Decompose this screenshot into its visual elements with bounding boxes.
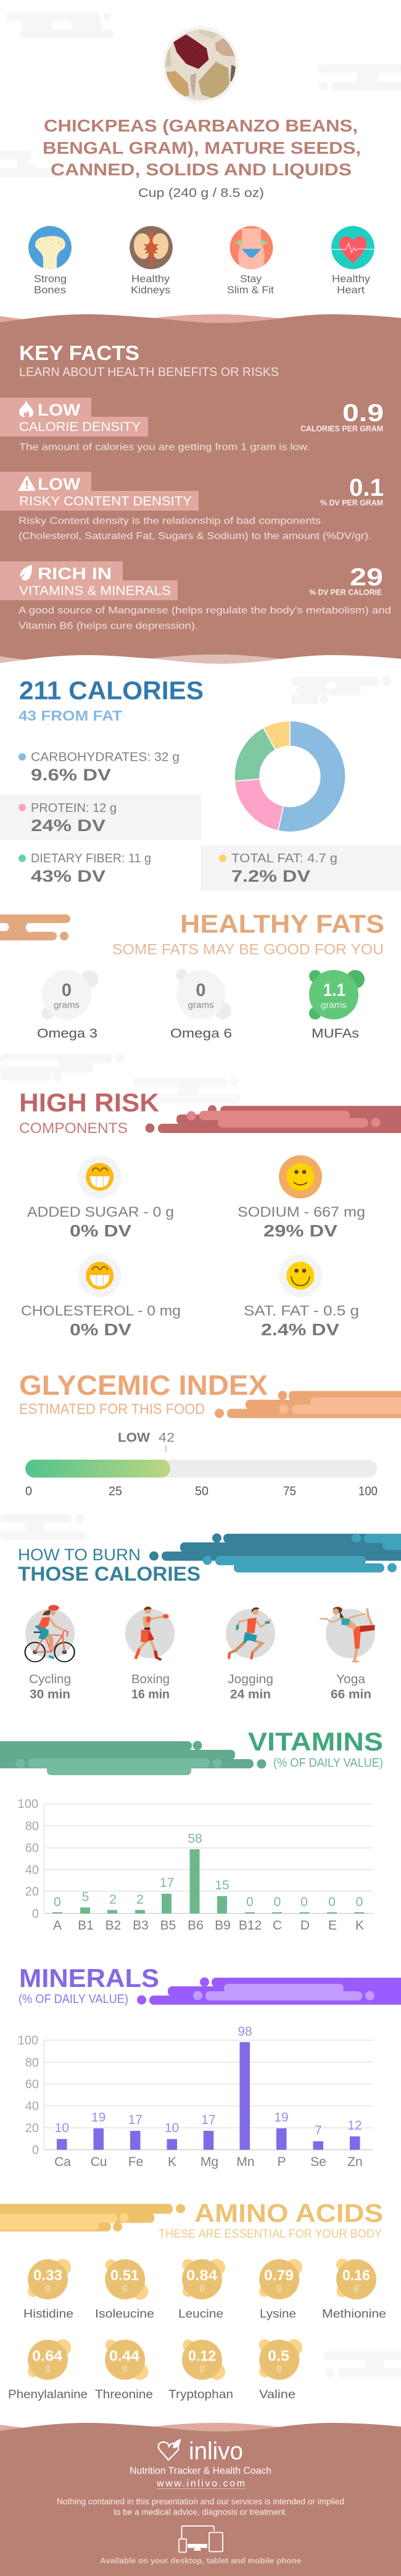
macro: carbohydrates: CARBOHYDRATES: 32 g: [31, 751, 180, 764]
heading: amino acids: AMINO ACIDS: [194, 2198, 383, 2227]
macro: total fat: TOTAL FAT: 4.7 g: [231, 852, 337, 866]
bar chart: minerals: Fe: [128, 2155, 143, 2169]
amino acid: histidine: 0.33: [33, 2267, 62, 2284]
fat: omega 6: 0: [196, 981, 206, 1000]
fat: omega 3: grams: [54, 1000, 80, 1011]
bar chart: vitamins: B1: [78, 1918, 94, 1933]
amino acid: threonine: Threonine: [95, 2388, 153, 2401]
macro: total fat: [200, 845, 401, 891]
bar chart: vitamins: B6: [188, 1918, 204, 1933]
fat: omega 3: Omega 3: [37, 1027, 97, 1041]
key fact: rich in vitamins and minerals: % DV PER CALORIE: [309, 588, 382, 596]
bar chart: vitamins: B9: [215, 1918, 231, 1933]
key fact: low calorie density: [0, 398, 384, 453]
title: CHICKPEAS (GARBANZO BEANS,: [44, 116, 358, 135]
key fact: low calorie density: CALORIE DENSITY: [19, 420, 141, 434]
health benefit: healthy heart: [331, 226, 374, 296]
heading: high risk components: HIGH RISK: [19, 1088, 159, 1117]
exercise: jogging: 24 min: [230, 1688, 271, 1702]
gauge: glycemic index: [25, 1431, 378, 1499]
exercise: cycling: Cycling: [29, 1673, 71, 1686]
bar chart: minerals: 17: [201, 2113, 216, 2127]
title: CANNED, SOLIDS AND LIQUIDS: [51, 160, 352, 179]
amino acid: leucine: g: [199, 2282, 205, 2293]
health benefit: healthy heart: Healthy: [332, 273, 371, 285]
heading: how to burn those calories: THOSE CALORIES: [18, 1563, 200, 1585]
risk item: sodium: SODIUM - 667 mg: [238, 1204, 365, 1220]
fat: MUFAs: 1.1: [323, 981, 345, 1000]
risk item: added sugar: ADDED SUGAR - 0 g: [27, 1204, 174, 1220]
decorative cloud: amino acids: [323, 2351, 401, 2377]
fat: omega 6: Omega 6: [170, 1027, 232, 1041]
exercise: jogging: [226, 1607, 275, 1702]
bar chart: vitamins: 80: [25, 1820, 39, 1833]
logo: inlivo: [159, 2438, 243, 2465]
fat: MUFAs: MUFAs: [312, 1027, 359, 1041]
heading: minerals: (% OF DAILY VALUE): [19, 1993, 128, 2006]
gauge: glycemic index: 75: [283, 1485, 296, 1499]
footer disclaimer: Nothing contained in this presentation and our services is intended or implied: [57, 2497, 344, 2506]
bar chart: minerals: 60: [25, 2078, 39, 2091]
bar chart: vitamins: D: [300, 1918, 310, 1933]
amino acid: histidine: g: [45, 2282, 51, 2293]
health benefit: healthy kidneys: Healthy: [131, 273, 170, 285]
amino acid: isoleucine: [95, 2259, 154, 2321]
macro: total fat: 7.2% DV: [231, 867, 310, 885]
decorative cloud: title left: [0, 151, 62, 177]
bar chart: minerals: Ca: [54, 2155, 71, 2169]
risk item: saturated fat: 2.4% DV: [261, 1321, 339, 1339]
heading: amino acids: THESE ARE ESSENTIAL FOR YOUR BODY: [159, 2228, 382, 2241]
key fact: low risky content density: % DV PER GRAM: [320, 498, 383, 508]
decorative swoosh: burn calories: [149, 1534, 401, 1573]
key fact: low risky content density: (Cholesterol, Saturated Fat, Sugars & Sodium) to the amount (%DV/gr).: [19, 531, 371, 542]
title: [43, 116, 361, 179]
gauge: glycemic index: 42: [159, 1431, 175, 1445]
heading: high risk components: COMPONENTS: [19, 1120, 128, 1137]
gauge: glycemic index: 0: [25, 1485, 32, 1499]
heading: glycemic index: ESTIMATED FOR THIS FOOD: [19, 1401, 205, 1418]
exercise: yoga: 66 min: [331, 1688, 371, 1702]
fat: omega 6: [170, 969, 232, 1041]
bar chart: minerals: 98: [238, 2025, 252, 2039]
gauge: glycemic index: 50: [195, 1485, 209, 1499]
amino acid: tryptophan: g: [199, 2362, 205, 2373]
health benefit: healthy kidneys: [130, 226, 173, 296]
bar chart: vitamins: 2: [109, 1892, 117, 1907]
decorative cloud: burn calories: [0, 1514, 86, 1540]
decorative cloud: header right: [318, 64, 401, 90]
heading: key facts: KEY FACTS: [19, 341, 139, 364]
bar chart: vitamins: B12: [239, 1918, 262, 1933]
bar chart: vitamins: B2: [105, 1918, 121, 1933]
amino acid: methionine: Methionine: [322, 2308, 386, 2321]
amino acid: isoleucine: g: [122, 2282, 127, 2293]
bar chart: minerals: 12: [347, 2118, 362, 2133]
bar chart: vitamins: 17: [160, 1876, 174, 1890]
gauge: glycemic index: 100: [358, 1485, 378, 1499]
fat: omega 6: grams: [188, 1000, 213, 1011]
icon: devices: [179, 2526, 223, 2553]
footer tagline: Nutrition Tracker & Health Coach: [130, 2466, 271, 2477]
heading: glycemic index: GLYCEMIC INDEX: [19, 1370, 268, 1401]
decorative cloud: high risk left: [0, 1054, 125, 1081]
exercise: cycling: [25, 1605, 75, 1702]
decorative cloud: header left: [6, 12, 114, 38]
health benefit: stay slim and fit: [227, 226, 274, 296]
bar chart: minerals: 100: [18, 2034, 38, 2047]
macro: protein: [0, 795, 201, 840]
health benefit: healthy kidneys: Kidneys: [131, 284, 170, 296]
panel: footer: [0, 2423, 401, 2576]
risk item: sodium: 29% DV: [263, 1222, 337, 1240]
bar chart: vitamins: 60: [25, 1841, 39, 1855]
decorative swoosh: healthy fats: [0, 914, 70, 940]
footer disclaimer: to be a medical advice, diagnosis or treatment.: [114, 2507, 287, 2517]
footer availability note: Available on your desktop, tablet and mobile phone: [100, 2556, 301, 2565]
bar chart: minerals: P: [277, 2155, 286, 2169]
decorative cloud: calories: [291, 677, 391, 704]
bar chart: vitamins: 2: [136, 1892, 144, 1907]
heading: vitamins: VITAMINS: [248, 1727, 383, 1756]
decorative swoosh: amino acids: [0, 2204, 185, 2231]
bar chart: minerals: 40: [25, 2099, 39, 2113]
bar chart: vitamins: 0: [328, 1895, 336, 1909]
amino acid: lysine: Lysine: [260, 2308, 296, 2321]
decorative swoosh: high risk: [146, 1105, 401, 1133]
bar chart: minerals: 80: [25, 2056, 39, 2070]
amino acid: lysine: g: [276, 2282, 281, 2293]
bar chart: vitamins: 0: [356, 1895, 363, 1909]
amino acid: phenylalanine: g: [45, 2362, 51, 2373]
amino acid: tryptophan: Tryptophan: [168, 2388, 233, 2401]
bar chart: vitamins: E: [328, 1918, 337, 1933]
heading: amino acids: [159, 2198, 383, 2241]
bar chart: minerals: 7: [315, 2123, 322, 2138]
panel: calories heading: [19, 676, 204, 724]
amino acid: valine: 0.5: [268, 2348, 289, 2364]
donut chart: macronutrients: [234, 721, 345, 832]
bar chart: vitamins: K: [355, 1918, 364, 1933]
bar chart: minerals: Se: [310, 2155, 326, 2169]
amino acid: valine: Valine: [259, 2388, 296, 2401]
bar chart: minerals: 20: [25, 2122, 39, 2135]
amino acid: threonine: 0.44: [109, 2348, 140, 2364]
amino acid: tryptophan: [168, 2340, 233, 2401]
bar chart: minerals: Mn: [236, 2155, 255, 2169]
fat: MUFAs: [309, 970, 365, 1041]
bar chart: minerals: K: [168, 2155, 176, 2169]
food photo: bags of beans: [162, 27, 239, 103]
bar chart: vitamins: 0: [300, 1895, 308, 1909]
exercise: cycling: 30 min: [30, 1688, 70, 1702]
bar chart: vitamins: 20: [25, 1885, 39, 1899]
bar chart: vitamins: 40: [25, 1863, 39, 1877]
bar chart: vitamins: 0: [32, 1907, 39, 1921]
bar chart: minerals: 19: [274, 2110, 289, 2125]
amino acid: methionine: [322, 2259, 386, 2321]
health benefit: healthy heart: Heart: [337, 284, 365, 296]
macro: carbohydrates: [19, 751, 180, 784]
health benefit: strong bones: Bones: [34, 284, 66, 296]
risk item: sodium: [238, 1155, 365, 1240]
key fact: low risky content density: RISKY CONTENT DENSITY: [19, 494, 192, 509]
key fact: low calorie density: 0.9: [342, 399, 384, 427]
amino acid: leucine: Leucine: [178, 2308, 223, 2321]
key fact: low risky content density: LOW: [38, 475, 81, 493]
risk item: added sugar: [27, 1155, 174, 1240]
key fact: low risky content density: [0, 472, 384, 542]
bar chart: minerals: 0: [32, 2144, 39, 2157]
decorative swoosh: glycemic index: [215, 1390, 401, 1418]
health benefit: stay slim and fit: Slim & Fit: [227, 284, 274, 296]
bar chart: vitamins: 0: [274, 1895, 281, 1909]
heading: healthy fats: HEALTHY FATS: [180, 910, 384, 939]
risk item: cholesterol: [21, 1254, 181, 1339]
gauge: glycemic index: 25: [109, 1485, 122, 1499]
risk item: added sugar: 0% DV: [70, 1222, 131, 1240]
bar chart: vitamins: 5: [82, 1890, 89, 1904]
key fact: rich in vitamins and minerals: A good source of Manganese (helps regulate the body's metabolism) and: [19, 605, 391, 616]
health benefit: stay slim and fit: Stay: [240, 273, 262, 285]
heading: healthy fats: [112, 910, 384, 958]
bar chart: minerals: 10: [165, 2121, 179, 2135]
exercise: boxing: 16 min: [131, 1688, 170, 1702]
amino acid: histidine: Histidine: [23, 2308, 73, 2321]
decorative cloud: high risk centre: [133, 1077, 241, 1103]
bar chart: vitamins: 0: [246, 1895, 254, 1909]
amino acid: tryptophan: 0.12: [188, 2348, 216, 2364]
amino acid: valine: [259, 2339, 302, 2401]
heading: how to burn those calories: HOW TO BURN: [18, 1545, 141, 1564]
macro: carbohydrates: 9.6% DV: [31, 766, 111, 784]
serving size: Cup (240 g / 8.5 oz): [138, 186, 264, 200]
key fact: low calorie density: CALORIES PER GRAM: [300, 424, 383, 433]
bar chart: vitamins: B3: [133, 1918, 149, 1933]
risk item: cholesterol: 0% DV: [70, 1321, 131, 1339]
heading: how to burn those calories: [18, 1545, 200, 1585]
bar chart: minerals: Cu: [91, 2155, 107, 2169]
risk item: saturated fat: SAT. FAT - 0.5 g: [244, 1303, 359, 1319]
logo: inlivo: inlivo: [189, 2438, 243, 2465]
risk item: saturated fat: [244, 1254, 359, 1339]
exercise: jogging: Jogging: [228, 1673, 273, 1686]
key fact: rich in vitamins and minerals: RICH IN: [38, 564, 112, 583]
panel: calories heading: 211 CALORIES: [19, 676, 204, 705]
heading: minerals: [19, 1963, 159, 2006]
bar chart: vitamins: 15: [215, 1878, 229, 1892]
amino acid: leucine: [178, 2259, 225, 2321]
bar chart: vitamins: [18, 1797, 373, 1933]
key fact: rich in vitamins and minerals: Vitamin B6 (helps cure depression).: [19, 621, 198, 631]
amino acid: histidine: [23, 2259, 73, 2321]
panel: calories heading: 43 FROM FAT: [19, 708, 122, 724]
amino acid: methionine: g: [353, 2282, 359, 2293]
bar chart: vitamins: A: [53, 1918, 62, 1933]
footer disclaimer: [57, 2497, 344, 2517]
heading: vitamins: (% OF DAILY VALUE): [273, 1757, 383, 1770]
key fact: rich in vitamins and minerals: [0, 561, 391, 631]
bar chart: vitamins: B5: [160, 1918, 176, 1933]
fat: omega 3: 0: [62, 981, 72, 1000]
bar chart: minerals: 17: [128, 2113, 143, 2127]
amino acid: phenylalanine: Phenylalanine: [8, 2388, 88, 2401]
bar chart: vitamins: C: [273, 1918, 282, 1933]
amino acid: lysine: 0.79: [264, 2267, 294, 2284]
heading: vitamins: [248, 1727, 383, 1770]
key fact: low risky content density: Risky Content density is the relationship of bad components: [19, 516, 321, 526]
amino acid: phenylalanine: [8, 2339, 88, 2401]
amino acid: isoleucine: 0.51: [110, 2267, 139, 2284]
bar chart: minerals: 19: [91, 2110, 105, 2125]
amino acid: threonine: [95, 2340, 153, 2401]
amino acid: leucine: 0.84: [186, 2267, 218, 2284]
heading: key facts: LEARN ABOUT HEALTH BENEFITS OR RISKS: [19, 366, 279, 379]
bar chart: vitamins: 0: [54, 1895, 61, 1909]
heading: glycemic index: [19, 1370, 268, 1418]
amino acid: methionine: 0.16: [342, 2267, 370, 2284]
amino acid: isoleucine: Isoleucine: [95, 2308, 154, 2321]
decorative swoosh: minerals: [137, 1977, 401, 2005]
key fact: low risky content density: 0.1: [349, 474, 384, 501]
heading: healthy fats: SOME FATS MAY BE GOOD FOR YOU: [112, 942, 384, 958]
exercise: yoga: [320, 1607, 375, 1702]
bar chart: minerals: Zn: [347, 2155, 363, 2169]
macro: dietary fiber: 43% DV: [31, 867, 105, 885]
amino acid: valine: g: [276, 2362, 281, 2373]
exercise: yoga: Yoga: [336, 1673, 366, 1686]
bar chart: vitamins: 100: [18, 1797, 38, 1811]
key fact: rich in vitamins and minerals: 29: [350, 564, 383, 591]
footer website: www.inlivo.com: [156, 2478, 245, 2489]
fat: MUFAs: grams: [321, 1000, 347, 1011]
panel: key facts: [0, 314, 401, 674]
exercise: boxing: Boxing: [131, 1673, 170, 1686]
key fact: low calorie density: The amount of calories you are getting from 1 gram is low.: [19, 442, 310, 453]
amino acid: phenylalanine: 0.64: [32, 2348, 63, 2364]
exercise: boxing: [125, 1607, 175, 1702]
macro: dietary fiber: DIETARY FIBER: 11 g: [31, 852, 151, 866]
bar chart: minerals: Mg: [200, 2155, 218, 2169]
title: BENGAL GRAM), MATURE SEEDS,: [43, 138, 361, 157]
heading: high risk components: [19, 1088, 159, 1137]
health benefit: strong bones: [28, 226, 72, 296]
gauge: glycemic index: LOW: [118, 1431, 150, 1445]
fat: omega 3: [37, 970, 99, 1041]
key fact: rich in vitamins and minerals: VITAMINS & MINERALS: [19, 584, 171, 598]
amino acid: threonine: g: [122, 2362, 127, 2373]
risk item: cholesterol: CHOLESTEROL - 0 mg: [21, 1303, 181, 1319]
heading: key facts: [19, 341, 279, 379]
bar chart: minerals: [18, 2025, 373, 2169]
decorative swoosh: vitamins: [0, 1741, 267, 1775]
key fact: low calorie density: LOW: [38, 401, 81, 419]
macro: protein: PROTEIN: 12 g: [31, 801, 117, 815]
health benefit: strong bones: Strong: [34, 273, 67, 285]
bar chart: minerals: 10: [55, 2121, 69, 2135]
amino acid: lysine: [259, 2259, 302, 2321]
macro: dietary fiber: [19, 852, 151, 885]
macro: protein: 24% DV: [31, 816, 105, 835]
bar chart: vitamins: 58: [188, 1831, 202, 1846]
heading: minerals: MINERALS: [19, 1963, 159, 1993]
